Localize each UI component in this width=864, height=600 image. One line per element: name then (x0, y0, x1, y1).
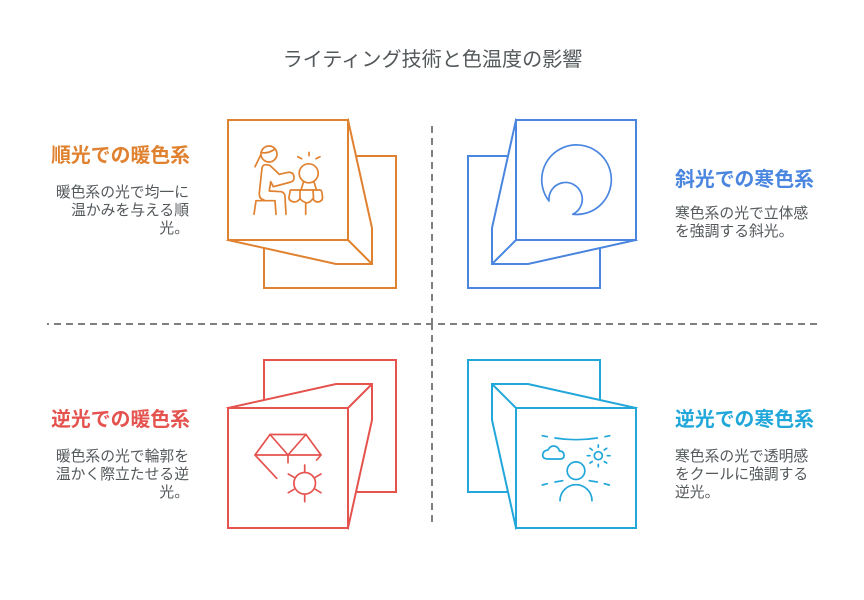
cube: front light warm (228, 120, 396, 288)
text block: back light cool (675, 448, 808, 501)
text block: front light warm: 光。 (159, 220, 189, 237)
vertical dashed divider: lower (431, 323, 433, 522)
horizontal dashed divider (47, 323, 817, 325)
panel: oblique light cool (468, 120, 814, 288)
panel: front light warm (51, 120, 396, 288)
icon: diamond and sun (255, 434, 321, 502)
icon: person lighting a seated child (254, 146, 323, 214)
panel: back light cool (468, 360, 814, 528)
heading: front light warm: 順光での暖色系 (51, 145, 190, 167)
text block: back light warm (56, 448, 189, 501)
text block: back light cool: 寒色系の光で透明感 (675, 448, 808, 465)
text block: front light warm: 温かみを与える順 (71, 202, 189, 219)
text block: front light warm: 暖色系の光で均一に (56, 184, 189, 201)
heading: back light cool: 逆光での寒色系 (675, 408, 814, 431)
icon: crescent shape (542, 145, 611, 215)
text block: back light warm: 温かく際立たせる逆 (56, 466, 189, 483)
text block: back light warm: 光。 (159, 484, 189, 501)
heading: back light warm: 逆光での暖色系 (51, 409, 190, 431)
text block: oblique light cool: 寒色系の光で立体感 (675, 205, 808, 222)
vertical dashed divider: upper (431, 126, 433, 325)
text block: oblique light cool: を強調する斜光。 (675, 223, 793, 240)
text block: front light warm (56, 184, 189, 237)
panel: back light warm (51, 360, 396, 528)
heading: oblique light cool: 斜光での寒色系 (675, 168, 814, 191)
text block: back light cool: 逆光。 (675, 484, 719, 501)
cube: back light cool (468, 360, 636, 528)
cube: back light warm (228, 360, 396, 528)
title: ライティング技術と色温度の影響 (283, 48, 582, 71)
icon: person with cloud and sun (542, 436, 610, 501)
text block: back light warm: 暖色系の光で輪郭を (56, 448, 189, 465)
cube: oblique light cool (468, 120, 636, 288)
text block: back light cool: をクールに強調する (675, 466, 808, 483)
text block: oblique light cool (675, 205, 808, 240)
